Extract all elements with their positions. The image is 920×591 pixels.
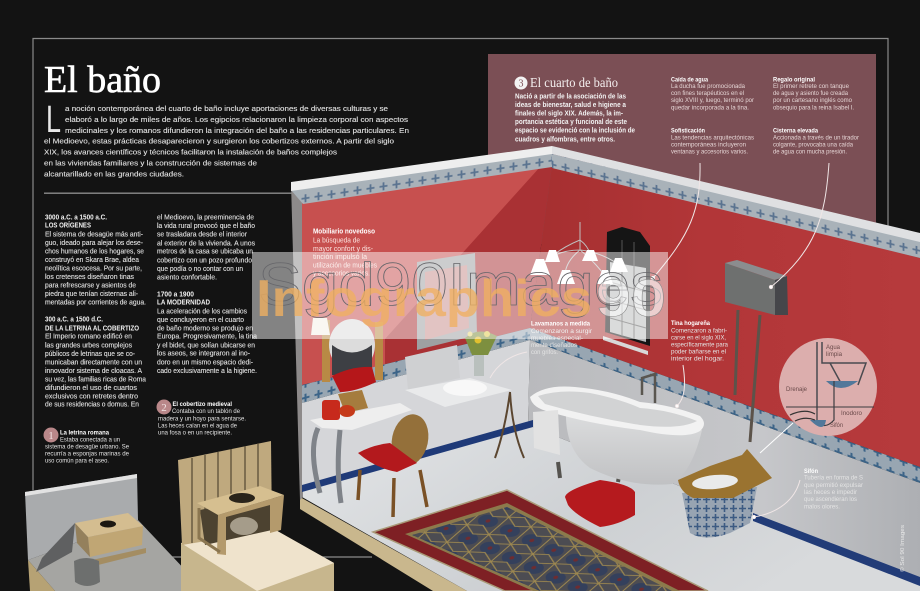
text column 1: El sistema de desagüe más anti-: [45, 229, 143, 238]
section 3 heading and text: ideas de bienestar, salud e higiene a: [515, 100, 627, 109]
intro text: medicinales y los romanos difundieron la integración del baño a las residencias particulares. En: [65, 126, 409, 135]
note: mobiliario novedoso: [313, 226, 377, 278]
intro text: [44, 99, 409, 178]
section 3 heading and text: El cuarto de baño: [530, 75, 618, 90]
note: sofisticación: Sofisticación: [671, 127, 705, 134]
note: lavamanos a medida: con grifos.: [531, 349, 558, 356]
text column 1: innovador sistema de cloacas. A: [45, 366, 143, 375]
note: tina hogareña: [671, 320, 728, 363]
note: sifón: las heces e impedir: [804, 489, 858, 496]
intro text: el Medioevo, estas prácticas desaparecieron y surgieron los cobertizos externos. A partir del siglo: [44, 137, 394, 146]
note: regalo original: de agua y asiento fue creada: [773, 90, 848, 97]
text column 1: públicos de letrinas que se co-: [45, 349, 135, 358]
intro text: a noción contemporánea del cuarto de baño incluye aportaciones de diversas culturas y se: [65, 104, 388, 113]
right wall red: [530, 165, 920, 467]
note: tina hogareña: específicamente para: [671, 342, 728, 349]
magnifier: siphon diagram: limpia: [826, 351, 842, 358]
text column 1: las grandes urbes complejos: [45, 340, 132, 349]
text column 2: doro en un mismo espacio dedi-: [157, 357, 253, 366]
baseboards: [302, 420, 533, 492]
text column 2: cobertizo con un pozo profundo: [157, 255, 252, 264]
section 3 heading and text: [514, 75, 635, 143]
maroon panel: [488, 54, 876, 244]
number badge 3: 3: [518, 78, 524, 90]
left frieze lower: [302, 328, 530, 403]
section 3 heading and text: portancia estética y funcional de este: [515, 117, 627, 126]
callout 2: el cobertizo medieval: una fosa o en un recipiente.: [158, 430, 232, 437]
text column 2: el Medioevo, la preeminencia de: [157, 212, 254, 221]
note: tina hogareña: interior del hogar.: [671, 356, 724, 363]
note: cisterna elevada: colgante, provocaba una caída: [773, 141, 853, 148]
bathtub: [530, 374, 704, 485]
text column 2: 1700 a 1900: [157, 289, 194, 298]
section 3 heading and text: finales del siglo XIX. Además, la im-: [515, 108, 623, 117]
note: sofisticación: Las tendencias arquitectónicas: [671, 134, 754, 141]
note: regalo original: por un cartesano inglés como: [773, 97, 852, 104]
note: mobiliario novedoso: Mobiliario novedoso: [313, 226, 375, 236]
note: tina hogareña: Comenzaron a fabri-: [671, 327, 727, 334]
text column 1: [45, 212, 147, 409]
text column 2: Europa. Progresivamente, la tina: [157, 332, 258, 341]
intro text: alcantarillado en las grandes ciudades.: [44, 169, 184, 178]
text column 1: neolítica escocesa. Por su parte,: [45, 264, 142, 273]
title: El baño: [44, 59, 161, 101]
text column 1: difundieron el uso de cuartos: [45, 383, 137, 392]
upper frieze left: [291, 153, 552, 204]
callout 1: la letrina romana: [44, 428, 129, 465]
callout 2: el cobertizo medieval: Contaba con un tablón de: [172, 408, 240, 415]
callout 1: la letrina romana: La letrina romana: [60, 429, 109, 436]
callout 1: la letrina romana: uso común para el aseo.: [45, 458, 109, 465]
magnifier: siphon diagram: Inodoro: [841, 410, 862, 417]
note: sofisticación: contemporáneas incluyeron: [671, 141, 746, 148]
callout 2: el cobertizo medieval: Las heces caían en el agua de: [158, 422, 237, 429]
text column 2: La aceleración de los cambios: [157, 306, 247, 315]
magnifier: siphon diagram: [779, 338, 877, 436]
note: sifón: [804, 468, 864, 510]
number badge 1: 1: [48, 430, 54, 442]
note: lavamanos a medida: muebles especial-: [531, 335, 583, 342]
magnifier: siphon diagram: Agua: [826, 344, 840, 351]
text column 1: los cretenses diseñaron tinas: [45, 272, 134, 281]
divider: [44, 192, 294, 194]
text column 1: DE LA LETRINA AL COBERTIZO: [45, 323, 139, 332]
callout 1: la letrina romana: sistema de desagüe urbano. Se: [45, 443, 129, 450]
cistern: [725, 260, 788, 442]
note: regalo original: obsequio para la reina Isabel I.: [773, 104, 854, 111]
note: cisterna elevada: Accionada a través de un tirador: [773, 134, 860, 141]
note: tina hogareña: poder bañarse en el: [671, 349, 727, 356]
text column 2: metros de la casa se ubicaba un: [157, 247, 253, 256]
watermark: Infographics: [256, 270, 592, 328]
text column 1: chos humanos de los hogares, se: [45, 247, 144, 256]
text column 1: guo, ideado para alejar los dese-: [45, 238, 143, 247]
wall mirror: [417, 253, 477, 350]
note: sifón: malos olores.: [804, 503, 840, 510]
note: sifón: Sifón: [804, 468, 818, 475]
credit: © Sol 90 Images: [899, 525, 906, 572]
note: regalo original: [773, 76, 854, 111]
note: sofisticación: [671, 127, 754, 155]
text column 2: cado exclusivamente a la higiene.: [157, 366, 257, 375]
magnifier: siphon diagram: Sifón: [830, 422, 843, 429]
icon: bucket: [74, 558, 100, 586]
text column 1: para refrescarse y asientos de: [45, 281, 136, 290]
text column 1: 3000 a.C. a 1500 a.C.: [45, 212, 107, 221]
note: mobiliario novedoso: utilización de muebles: [313, 260, 377, 270]
note: caída de agua: quedar incorporada a la tina.: [671, 104, 749, 111]
callout 2: el cobertizo medieval: [156, 400, 246, 437]
section 3 heading and text: Nació a partir de la asociación de las: [515, 92, 626, 101]
text column 1: piedra que tenían cisternas ali-: [45, 289, 138, 298]
note: lavamanos a medida: Lavamanos a medida: [531, 320, 590, 328]
note: sifón: que ascendieran los: [804, 496, 858, 503]
leader lines: [490, 163, 829, 519]
callout 1: la letrina romana: recurría a esponjas marinas de: [45, 451, 129, 458]
illustration: roman latrine: [25, 474, 205, 591]
floor slab edge: [300, 497, 467, 591]
text column 2: de baño moderno se produjo en: [157, 323, 253, 332]
text column 1: El Imperio romano edificó en: [45, 332, 132, 341]
text column 1: LOS ORÍGENES: [45, 221, 91, 230]
window: [603, 227, 650, 355]
watermark: [252, 251, 668, 339]
floor: [302, 425, 920, 591]
illustration: medieval shed: [178, 441, 334, 591]
note: caída de agua: [671, 76, 755, 111]
note: cisterna elevada: Cisterna elevada: [773, 127, 818, 134]
section 3 heading and text: cuadros y alfombras, entre otros.: [515, 134, 615, 143]
note: sifón: Tubería en forma de S: [804, 475, 864, 482]
text column 2: que podía o no contar con un: [157, 264, 243, 273]
note: mobiliario novedoso: y accesorios varios.: [313, 268, 370, 278]
text column 2: y el bidet, que solían ubicarse en: [157, 340, 255, 349]
callout 2: el cobertizo medieval: madera y un hoyo para sentarse.: [158, 415, 246, 422]
text column 2: LA MODERNIDAD: [157, 298, 210, 307]
note: sifón: que permitió expulsar: [804, 482, 864, 489]
magnifier: siphon diagram: Drenaje: [786, 386, 807, 393]
right wainscot: [528, 340, 920, 583]
right frieze lower: [530, 328, 920, 483]
text column 2: al exterior de la vivienda. A unos: [157, 238, 255, 247]
text column 1: mentadas por corrientes de agua.: [45, 298, 146, 307]
note: mobiliario novedoso: tinción impulsó la: [313, 252, 368, 261]
number badge 2: 2: [161, 402, 167, 414]
left wainscot: [302, 340, 530, 490]
text column 2: se trasladara desde el interior: [157, 230, 247, 239]
note: lavamanos a medida: Comenzaron a surgir: [531, 328, 593, 335]
drop cap: L: [46, 99, 61, 141]
text column 1: de sus residencias o domus. En: [45, 400, 139, 409]
illustration: bathroom room: [291, 146, 920, 591]
toilet: [678, 449, 772, 538]
chandelier: [530, 222, 628, 284]
text column 2: la vida rural provocó que el baño: [157, 221, 255, 230]
text column 2: asiento confortable.: [157, 272, 217, 281]
note: caída de agua: siglo XVIII y, luego, terminó por: [671, 97, 755, 104]
text column 2: [157, 212, 258, 375]
note: lavamanos a medida: [531, 320, 593, 356]
chair: [358, 411, 433, 517]
note: mobiliario novedoso: La búsqueda de: [313, 236, 360, 244]
note: mobiliario novedoso: mayor confort y dis-: [313, 244, 373, 253]
upper frieze right: [552, 154, 920, 258]
text column 1: exclusivos con retretes dentro: [45, 391, 138, 400]
note: cisterna elevada: [773, 127, 860, 155]
intro text: XIX, los avances científicos y técnicos facilitaron la instalación de baños complejos: [44, 148, 337, 157]
note: regalo original: Regalo original: [773, 76, 815, 83]
intro text: elaboró a lo largo de miles de años. Los egipcios relacionaron la limpieza corporal con aspectos: [65, 115, 408, 124]
callout 1: la letrina romana: Estaba conectada a un: [60, 436, 120, 443]
text column 1: construyó en Skara Brae, aldea: [45, 255, 140, 264]
section 3 heading and text: espacio se evidenció con la inclusión de: [515, 126, 635, 135]
text column 1: municaban directamente con un: [45, 357, 142, 366]
vanity table with mirror: [310, 318, 412, 503]
note: regalo original: El primer retrete con tanque: [773, 83, 849, 90]
note: sofisticación: ventanas y accesorios varios.: [671, 148, 748, 155]
note: caída de agua: Caída de agua: [671, 76, 708, 83]
intro text: en las viviendas familiares y la construcción de sistemas de: [44, 158, 257, 167]
rug: [373, 490, 708, 591]
note: tina hogareña: Tina hogareña: [671, 320, 710, 327]
left wall red: [302, 165, 552, 385]
watermark: Sgd90Images: [258, 251, 663, 318]
note: caída de agua: La ducha fue promocionada: [671, 83, 745, 90]
text column 1: su vez, las familias ricas de Roma: [45, 374, 147, 383]
note: cisterna elevada: de agua con mucha presión.: [773, 148, 847, 155]
text column 1: 300 a.C. a 1500 d.C.: [45, 315, 103, 324]
note: tina hogareña: carse en el siglo XIX,: [671, 335, 726, 342]
text column 2: los aseos, se integraron al ino-: [157, 349, 250, 358]
note: lavamanos a medida: mente diseñados: [531, 342, 578, 349]
ottoman: [565, 480, 635, 527]
sink with vase: [405, 331, 524, 458]
text column 2: que concluyeron en el cuarto: [157, 315, 244, 324]
note: caída de agua: con fines terapéuticos en el: [671, 90, 744, 97]
left wall end: [291, 183, 303, 500]
callout 2: el cobertizo medieval: El cobertizo medieval: [172, 401, 232, 408]
watermark: 90: [596, 270, 666, 328]
